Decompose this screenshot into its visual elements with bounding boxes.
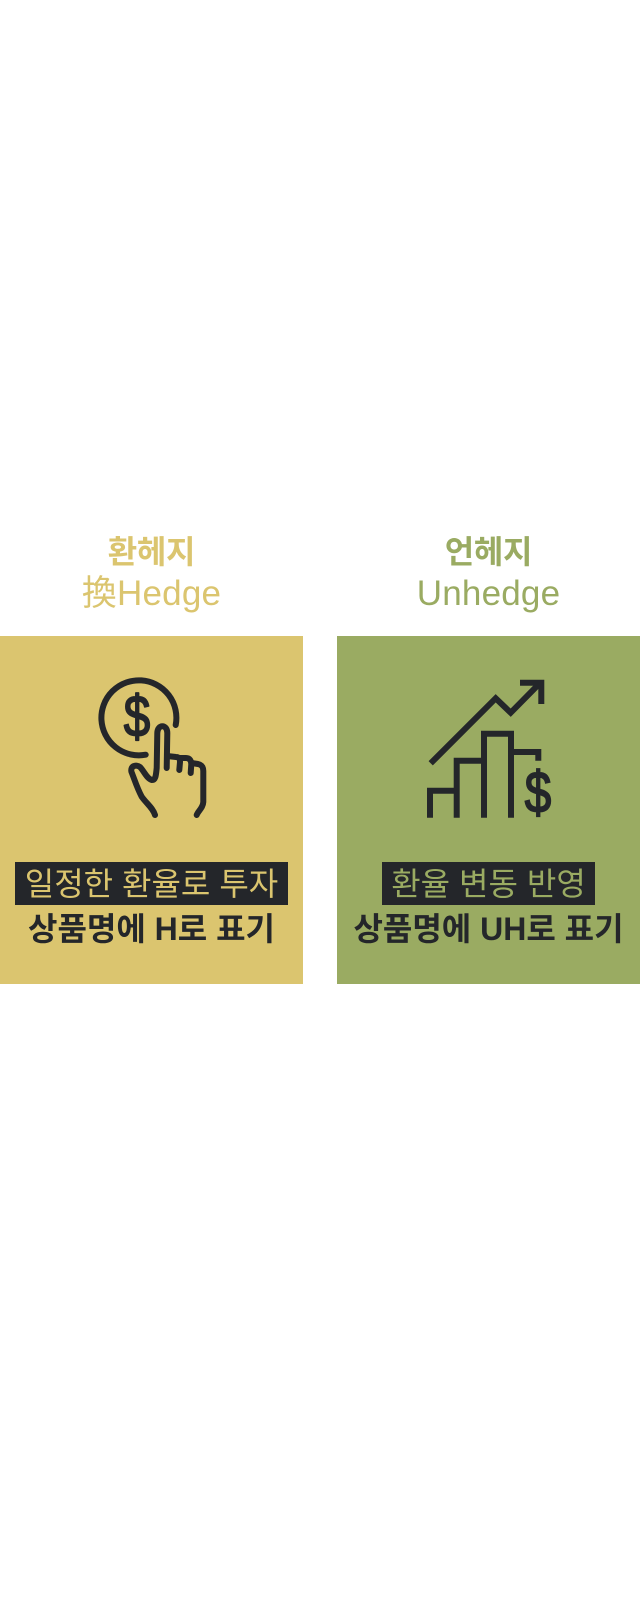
subheading: hedge: 換Hedge xyxy=(82,574,221,613)
panel: hedge column xyxy=(0,527,303,984)
card: hedge xyxy=(0,636,303,984)
note: UH marking: 상품명에 UH로 표기 xyxy=(353,911,624,947)
icon: rising chart with dollar xyxy=(427,680,552,825)
heading: unhedge: 언헤지 xyxy=(445,527,532,573)
subheading: unhedge: Unhedge xyxy=(417,574,560,613)
icon: rising chart with dollar: $ xyxy=(525,761,551,825)
note: H marking: 상품명에 H로 표기 xyxy=(28,911,275,947)
panel: unhedge column xyxy=(337,527,640,984)
label: fixed exchange rate: 일정한 환율로 투자 xyxy=(25,859,278,905)
icon: hand pressing dollar coin: $ xyxy=(124,685,150,749)
label: reflects exchange rate changes: 환율 변동 반영 xyxy=(391,859,586,905)
heading: hedge: 환헤지 xyxy=(108,527,195,573)
card: unhedge xyxy=(337,636,640,984)
icon: hand pressing dollar coin xyxy=(98,677,206,818)
